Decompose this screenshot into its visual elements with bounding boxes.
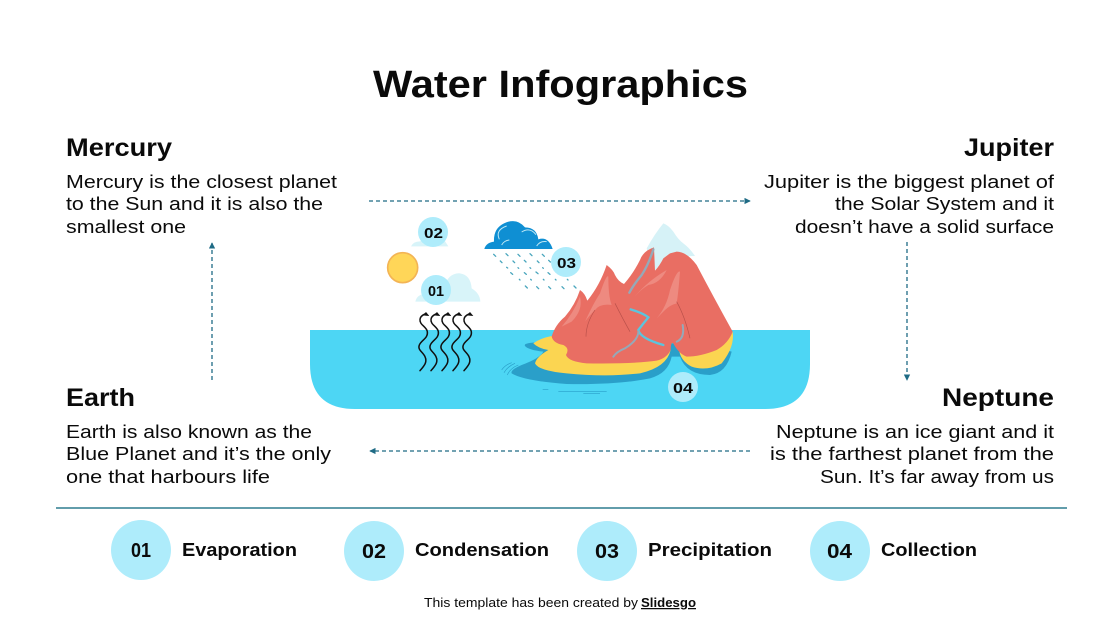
- legend item: 04 Collection: [810, 521, 977, 581]
- ripples: [543, 389, 607, 393]
- ripples: left of island: [502, 363, 518, 375]
- text: Mercury description: [66, 171, 337, 237]
- badge: 03: [551, 247, 581, 277]
- text: Jupiter description: the Solar System and it: [835, 193, 1054, 214]
- legend item: 02 Condensation: 02: [362, 541, 386, 563]
- icon: rain cloud: [484, 221, 576, 289]
- arrow: Earth to Mercury: [211, 243, 213, 380]
- water cycle illustration: [310, 217, 810, 409]
- water body: [310, 330, 810, 409]
- heading: Mercury: Mercury: [66, 134, 172, 162]
- sun, clouds and evaporation: [388, 233, 480, 371]
- text: Neptune description: Sun. It’s far away from us: [820, 466, 1054, 487]
- icon: evaporation arrows: [419, 312, 473, 371]
- panel: Mercury: [66, 134, 337, 237]
- snow cap: [647, 223, 695, 272]
- icon: light cloud: [415, 273, 480, 302]
- badge: 03: 03: [557, 255, 576, 272]
- legend item: 01 Evaporation: [111, 520, 297, 580]
- island shadow: [511, 343, 732, 384]
- arrow: Mercury to Jupiter: [369, 200, 750, 202]
- badge: 02: [418, 217, 448, 247]
- legend item: 03 Precipitation: Precipitation: [648, 540, 772, 560]
- legend item: 03 Precipitation: 03: [595, 541, 619, 563]
- legend item: 01 Evaporation: Evaporation: [182, 540, 297, 560]
- badge: 02: 02: [424, 225, 443, 242]
- text: Neptune description: is the farthest planet from the: [770, 443, 1054, 464]
- icon: sun: [388, 253, 418, 283]
- text: Earth description: one that harbours life: [66, 466, 270, 487]
- text: Neptune description: [770, 421, 1054, 487]
- river: [613, 249, 683, 357]
- mountain creases: [586, 302, 690, 338]
- credit line: This template has been created by: [424, 596, 639, 610]
- mountains: [552, 247, 733, 363]
- rain: [494, 254, 576, 289]
- text: Jupiter description: [764, 171, 1055, 237]
- panel: Jupiter: [764, 134, 1055, 237]
- right beach: [679, 332, 733, 369]
- text: Mercury description: smallest one: [66, 216, 186, 237]
- legend item: 03 Precipitation: [577, 521, 772, 581]
- text: Jupiter description: doesn’t have a solid surface: [795, 216, 1054, 237]
- heading: Earth: Earth: [66, 384, 135, 412]
- legend item: 02 Condensation: Condensation: [415, 540, 549, 560]
- text: Earth description: Earth is also known as the: [66, 421, 312, 442]
- text: Earth description: Blue Planet and it’s the only: [66, 443, 332, 464]
- left beach: [533, 336, 671, 375]
- arrow: Neptune to Earth: [370, 450, 750, 452]
- text: Mercury description: to the Sun and it is also the: [66, 193, 323, 214]
- badge: 01: 01: [428, 283, 444, 300]
- badge: 01: [421, 275, 451, 305]
- island and mountains: [511, 223, 733, 393]
- text: Mercury description: Mercury is the closest planet: [66, 171, 337, 192]
- legend item: 01 Evaporation: 01: [131, 540, 151, 562]
- badge: 04: 04: [673, 380, 694, 397]
- badge: 04: [668, 372, 698, 402]
- text: Earth description: [66, 421, 332, 487]
- panel: Earth: [66, 384, 332, 487]
- credit line: Slidesgo: [641, 596, 696, 610]
- mountain highlights: [562, 270, 680, 327]
- icon: small cloud: [411, 233, 448, 246]
- arrow: Jupiter to Neptune: [906, 242, 908, 380]
- title: Water Infographics: [373, 64, 748, 106]
- legend: [111, 520, 977, 581]
- heading: Jupiter: Jupiter: [964, 134, 1054, 162]
- text: Neptune description: Neptune is an ice giant and it: [776, 421, 1054, 442]
- panel: Neptune: [770, 384, 1054, 487]
- heading: Neptune: Neptune: [942, 384, 1054, 412]
- legend item: 02 Condensation: [344, 521, 549, 581]
- legend item: 04 Collection: Collection: [881, 540, 977, 560]
- text: Jupiter description: Jupiter is the biggest planet of: [764, 171, 1055, 192]
- legend item: 04 Collection: 04: [827, 541, 853, 563]
